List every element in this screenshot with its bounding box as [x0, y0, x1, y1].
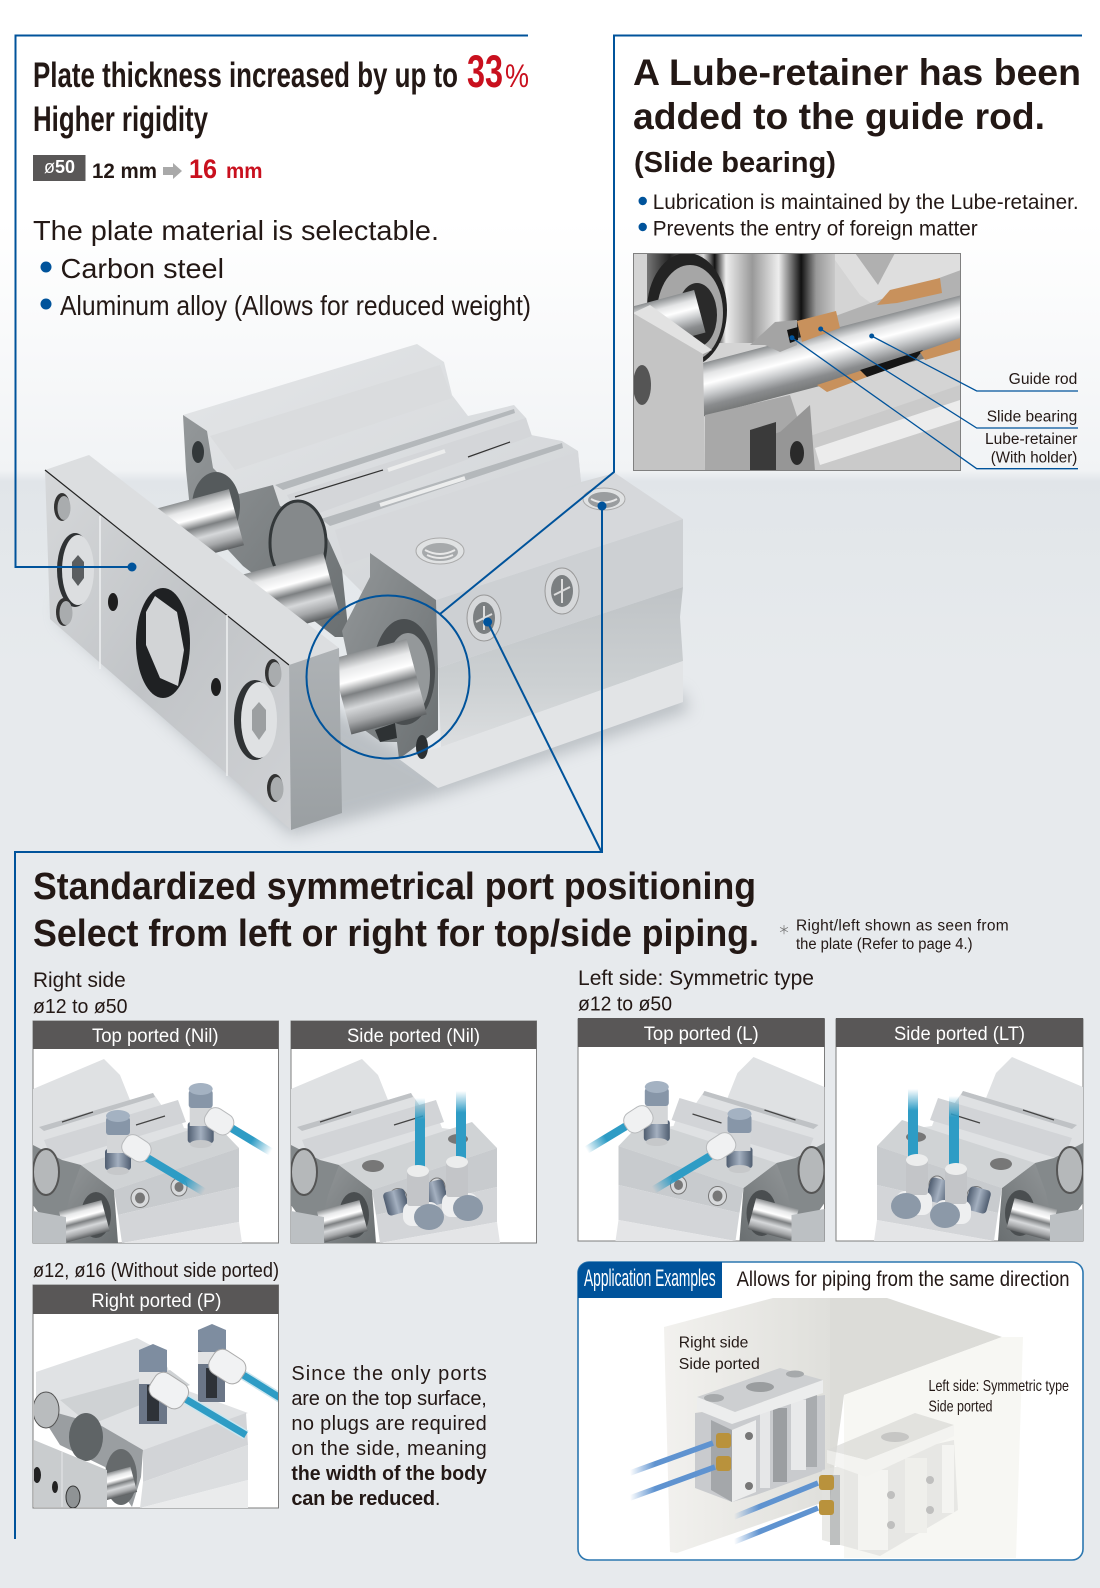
panel: right ported (P): Right ported (P): [91, 1290, 221, 1312]
label: left side sizes: ø12 to ø50: [578, 994, 672, 1016]
panel: top ported (Nil): Top ported (Nil): [92, 1025, 219, 1047]
note: right/left definition: Right/left shown as seen from: [796, 918, 1009, 935]
heading: port positioning: [33, 866, 759, 955]
callout frame: plate: [16, 36, 528, 572]
label: small bore sizes: ø12, ø16 (Without side ported): [33, 1260, 279, 1282]
heading: plate thickness: Higher rigidity: [33, 100, 208, 139]
label: left side sizes: Left side: Symmetric type: [578, 967, 814, 990]
text: width of body can be reduced: [291, 1363, 488, 1510]
panel: right ported (P): [33, 1285, 290, 1508]
port: top: [416, 538, 464, 564]
label: right side side ported: Side ported: [679, 1356, 760, 1373]
heading: plate thickness: 33: [467, 46, 503, 97]
front block body: [342, 473, 683, 788]
callout frame: lube-retainer with circle: [306, 36, 1082, 758]
front guide rod: [331, 619, 435, 735]
illustration: guide cylinder main product: [45, 344, 690, 835]
rear cylinder body: [183, 344, 640, 600]
panel: side ported (LT): Side ported (LT): [894, 1023, 1025, 1045]
label: slide bearing: Slide bearing: [987, 409, 1077, 426]
panel: side ported (Nil): Side ported (Nil): [347, 1025, 480, 1047]
end plate: [45, 455, 342, 830]
text: plate material options: Aluminum alloy (Allows for reduced weight): [60, 290, 531, 321]
text: width of body can be reduced: on the side, meaning: [291, 1438, 487, 1460]
label: right side sizes: [33, 969, 128, 1018]
text: lube-retainer bullets: Lubrication is maintained by the Lube-retainer.: [653, 191, 1079, 214]
header tag: application examples: [578, 1262, 722, 1298]
label: left side symmetric side ported: Side ported: [928, 1399, 992, 1416]
text: width of body can be reduced: Since the only ports: [291, 1363, 487, 1385]
panel: top ported (Nil): [33, 1021, 278, 1243]
illustration: wall-mounted cylinders: [630, 1298, 1023, 1558]
fittings: right side: [716, 1433, 731, 1471]
panel: application examples: [578, 1262, 1083, 1560]
heading: lube-retainer: [633, 52, 1081, 179]
heading: plate thickness: [33, 46, 529, 139]
label: lube-retainer with holder: [985, 431, 1077, 467]
text: width of body can be reduced: the width of the body: [291, 1463, 488, 1485]
label: left side symmetric side ported: [928, 1378, 1069, 1416]
text: lube-retainer bullets: [638, 191, 1079, 241]
heading: port positioning: Select from left or right for top/side piping.: [33, 913, 759, 955]
text: width of body can be reduced: are on the top surface,: [291, 1388, 487, 1410]
heading: plate thickness: %: [505, 58, 529, 94]
badge: bore size 50: ø50: [44, 157, 75, 177]
header tag text: Application Examples: [584, 1265, 716, 1292]
label: right side sizes: Right side: [33, 969, 126, 992]
panel: top ported (L): [578, 1018, 824, 1241]
tubes and fittings: [139, 1324, 290, 1435]
drop shadow: [60, 600, 690, 835]
callout leaders: cutaway parts: [790, 326, 1078, 469]
icon: arrow: [163, 163, 182, 179]
callout frame: ports: [15, 502, 606, 1539]
rear end face and bores: [154, 415, 349, 638]
label: guide rod: Guide rod: [1009, 371, 1077, 388]
label: right side side ported: Right side: [679, 1335, 748, 1352]
label: right side side ported: [679, 1335, 760, 1373]
label: lube-retainer with holder: Lube-retainer: [985, 431, 1077, 448]
heading: lube-retainer: (Slide bearing): [634, 147, 836, 179]
text: plate material options: [33, 215, 531, 321]
port: rear top: [583, 488, 625, 510]
cylinder: right side: [695, 1368, 825, 1502]
heading: plate thickness: Plate thickness increased by up to: [33, 56, 458, 95]
bearing: copper: [877, 278, 942, 305]
thickness change 12 mm to 16 mm: 12 mm: [92, 160, 157, 183]
heading: lube-retainer: A Lube-retainer has been: [633, 52, 1081, 93]
panel: side ported (Nil): [291, 1021, 536, 1243]
heading: lube-retainer: added to the guide rod.: [633, 96, 1045, 137]
cylinder: left side symmetric type: [822, 1413, 958, 1556]
text: width of body can be reduced: no plugs are required: [291, 1413, 487, 1435]
label: right side sizes: ø12 to ø50: [33, 996, 128, 1018]
tubes: left side: [734, 1483, 818, 1542]
note: right/left definition: ＊: [778, 923, 790, 937]
side plug screws: [467, 568, 579, 641]
panel: top ported (L): Top ported (L): [644, 1023, 759, 1045]
text: plate material options: The plate material is selectable.: [33, 215, 439, 246]
text: lube-retainer bullets: Prevents the entry of foreign matter: [653, 218, 978, 241]
thickness change 12 mm to 16 mm: [92, 154, 262, 184]
note: right/left definition: [778, 918, 1009, 953]
thickness change 12 mm to 16 mm: mm: [226, 160, 262, 183]
label: lube-retainer with holder: (With holder): [991, 450, 1077, 467]
label: left side sizes: [578, 967, 814, 1016]
fittings: left side: [819, 1475, 834, 1515]
panel: side ported (LT): [836, 1018, 1083, 1241]
tubes: right side: [630, 1443, 715, 1498]
heading: port positioning: Standardized symmetrical port positioning: [33, 866, 756, 908]
text: width of body can be reduced: can be reduced.: [291, 1488, 440, 1510]
illustration: guide rod cutaway: [633, 253, 961, 471]
thickness change 12 mm to 16 mm: 16: [189, 154, 217, 184]
text: plate material options: Carbon steel: [60, 253, 224, 284]
note: right/left definition: the plate (Refer to page 4.): [796, 936, 972, 953]
badge: bore size 50: [33, 155, 86, 181]
